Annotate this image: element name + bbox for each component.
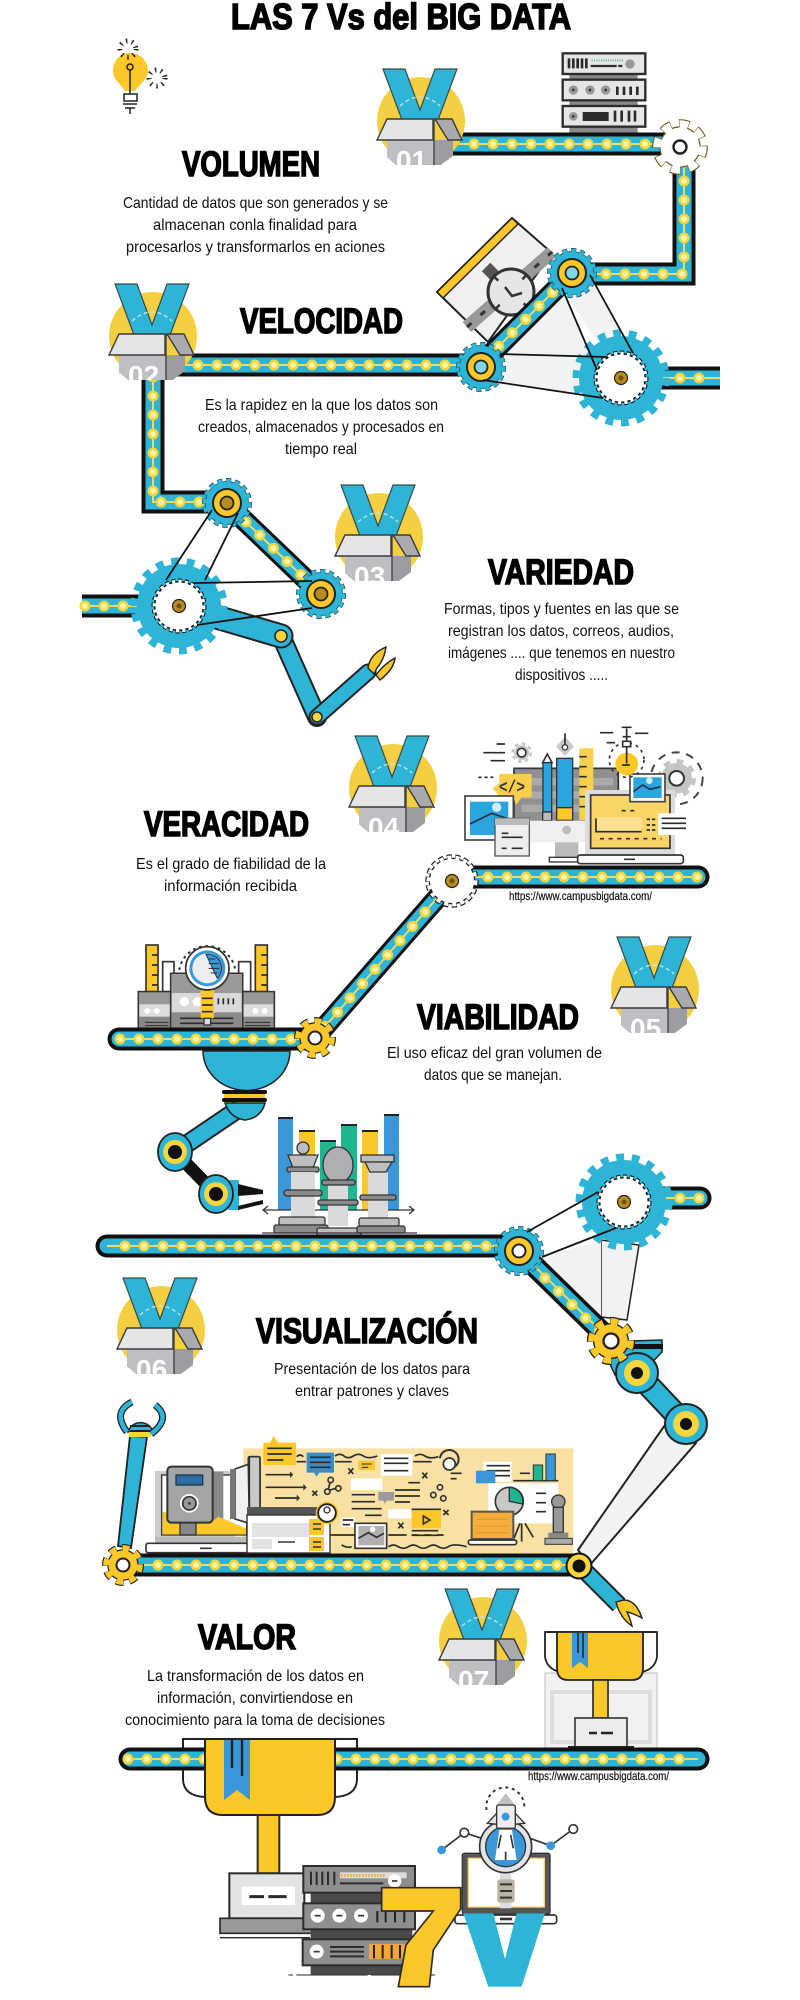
robotic arm: white arm to lower belt — [578, 1340, 707, 1565]
text: veracidad: información recibida — [164, 878, 297, 895]
belt end roller — [566, 1554, 592, 1578]
icon: light bulb — [113, 41, 165, 114]
text: velocidad: tiempo real — [285, 441, 357, 458]
belt: diagonal visualizacion — [519, 1251, 611, 1341]
badge 07 — [439, 1589, 527, 1696]
gear: right section 3 — [298, 572, 344, 616]
text: visualizacion — [274, 1361, 470, 1400]
badge 05: 05 — [630, 1013, 661, 1044]
belt: big gear exit — [621, 366, 720, 390]
belt: viabilidad — [119, 1028, 315, 1050]
small trophy — [545, 1632, 657, 1748]
heading: velocidad: VELOCIDAD — [240, 302, 403, 341]
illustration: servers and magnifier — [138, 945, 274, 1030]
badge 01 — [377, 69, 465, 176]
text: visualizacion: entrar patrones y claves — [295, 1383, 449, 1400]
heading: viabilidad: VIABILIDAD — [417, 998, 579, 1037]
pulley lines velocidad — [483, 275, 633, 398]
illustration: design workspace — [465, 727, 703, 864]
belt: velocidad diagonal — [479, 273, 572, 366]
illustration: browser window on belt — [247, 1502, 338, 1553]
badge 02: 02 — [128, 360, 159, 391]
text: viabilidad — [387, 1045, 602, 1084]
robotic arm: left gripper — [118, 1402, 163, 1548]
gear: big visualizacion — [580, 1158, 668, 1246]
gear: viabilidad yellow — [298, 1021, 332, 1055]
belts: grey pulley visualizacion — [542, 1240, 639, 1320]
robotic arm: viabilidad — [158, 1051, 290, 1213]
badge 03 — [335, 485, 423, 592]
belt: section 3 diagonal — [226, 503, 321, 594]
gear: yellow visualizacion — [591, 1321, 631, 1361]
big trophy handles — [183, 1739, 357, 1797]
badge 04: 04 — [368, 812, 400, 843]
belt: section 3 input — [82, 594, 179, 618]
gear: lower velocidad — [458, 344, 504, 390]
section 3 arm — [179, 606, 395, 722]
text: variedad — [444, 601, 679, 684]
belt: veracidad right — [452, 866, 698, 888]
illustration: chess pieces — [262, 1142, 417, 1236]
gear: yellow lower left — [106, 1548, 140, 1582]
heading: volumen: VOLUMEN — [182, 145, 320, 184]
illustration: bottom servers, trophy stand, 7V and rocket — [220, 1787, 578, 1987]
text: veracidad: Es el grado de fiabilidad de la — [136, 856, 326, 873]
text: valor: información, convirtiendose en — [157, 1690, 353, 1707]
pulley lines section 3 — [166, 510, 312, 625]
pulley lines visualizacion — [527, 1192, 616, 1257]
heading: valor: VALOR — [198, 1618, 296, 1657]
big trophy — [205, 1739, 335, 1815]
text: velocidad — [198, 397, 444, 458]
belt: chess — [107, 1234, 519, 1258]
text: volumen — [123, 195, 388, 256]
badge 07: 07 — [458, 1665, 489, 1696]
text: volumen: almacenan conla finalidad para — [153, 217, 357, 234]
heading: visualizacion: VISUALIZACIÓN — [256, 1311, 478, 1351]
belt: veracidad diagonal — [315, 881, 452, 1038]
heading: veracidad: VERACIDAD — [144, 805, 309, 844]
illustration: design workspace: </> — [499, 780, 525, 799]
belt: velocidad horizontal — [153, 365, 479, 502]
gear: big velocidad — [577, 334, 665, 422]
text: valor: La transformación de los datos en — [147, 1668, 364, 1685]
gear: upper velocidad — [550, 250, 594, 296]
gear: chess belt — [496, 1228, 542, 1274]
belt: big gear exit two — [624, 1186, 700, 1210]
text: velocidad: creados, almacenados y procesados en — [198, 419, 444, 436]
heading: variedad: VARIEDAD — [488, 553, 634, 592]
gear: veracidad white — [428, 857, 476, 905]
badge 06 — [117, 1278, 205, 1385]
belt: valor — [128, 1748, 698, 1770]
text: velocidad: Es la rapidez en la que los datos son — [205, 397, 438, 414]
gear: white corner — [656, 124, 704, 170]
text: volumen: Cantidad de datos que son generados y se — [123, 195, 388, 212]
chart: bars behind chess pieces — [263, 1114, 414, 1214]
text: veracidad — [136, 856, 326, 895]
text: variedad: Formas, tipos y fuentes en las que se — [444, 601, 679, 618]
robotic arm: lower claw — [582, 1568, 642, 1626]
source url one: https://www.campusbigdata.com/ — [509, 889, 653, 903]
text: variedad: registran los datos, correos, audios, — [448, 623, 674, 640]
text: valor: conocimiento para la toma de decisiones — [125, 1712, 385, 1729]
belt: volumen to velocidad — [452, 144, 684, 274]
badge 05 — [611, 937, 699, 1044]
illustration: watch on window — [437, 218, 552, 342]
gear: big section 3 — [135, 562, 223, 650]
text: volumen: procesarlos y transformarlos en aciones — [126, 239, 385, 256]
gear: top section 3 — [204, 480, 250, 526]
text: variedad: dispositivos ..... — [515, 667, 608, 684]
badge 03: 03 — [354, 561, 385, 592]
text: viabilidad: El uso eficaz del gran volumen de — [387, 1045, 602, 1062]
belt: lower visualizacion — [123, 1554, 580, 1576]
badge 04 — [349, 736, 437, 843]
belts: grey pulley velocidad — [483, 273, 633, 398]
icon: server stack — [563, 53, 645, 133]
illustration: desktop tower and laptop — [146, 1457, 260, 1553]
text: variedad: imágenes .... que tenemos en nuestro — [448, 645, 675, 662]
badge 01: 01 — [396, 145, 427, 176]
text: visualizacion: Presentación de los datos para — [274, 1361, 470, 1378]
source url two: https://www.campusbigdata.com/ — [528, 1769, 670, 1783]
text: valor — [125, 1668, 385, 1729]
text: viabilidad: datos que se manejan. — [424, 1067, 562, 1084]
badge 02 — [109, 284, 197, 391]
badge 06: 06 — [136, 1354, 167, 1385]
illustration: data wall — [243, 1436, 573, 1553]
